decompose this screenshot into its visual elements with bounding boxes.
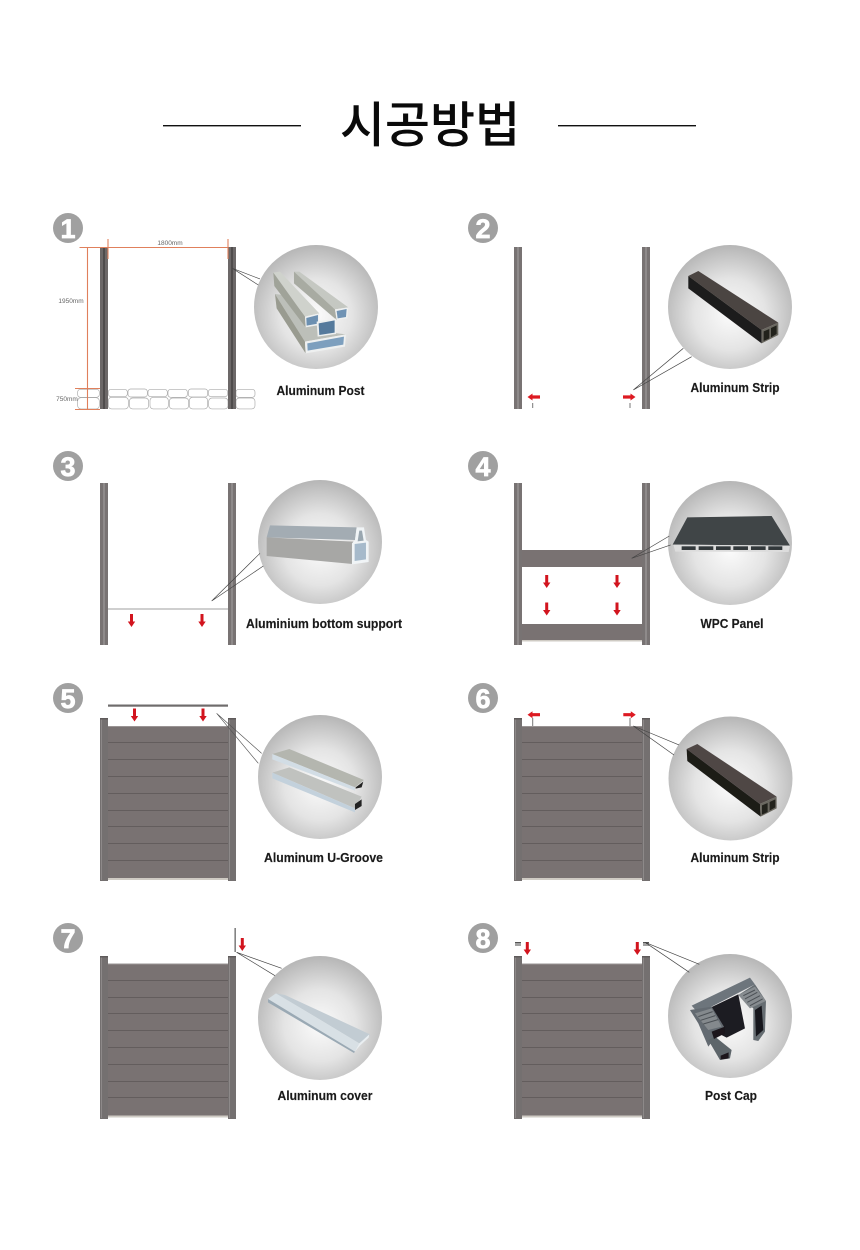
product circle <box>254 245 378 369</box>
product: aluminum cover <box>237 952 370 1053</box>
product circle <box>258 956 382 1080</box>
product circle <box>668 481 792 605</box>
badge 2 <box>468 213 498 244</box>
product: post cap <box>645 942 766 1060</box>
product: u-groove <box>217 713 364 812</box>
dimension 1950mm: 1950mm <box>58 298 84 305</box>
badge 4: 4 <box>475 452 491 482</box>
product: aluminum strip <box>633 726 777 817</box>
post left <box>100 483 108 645</box>
product: WPC panel <box>632 516 790 558</box>
strip markers <box>533 403 630 408</box>
panel lower <box>522 624 642 642</box>
arrow left <box>528 711 540 718</box>
dimension lines <box>75 239 228 410</box>
panel: step 5 aluminum u-groove <box>53 683 383 881</box>
badge 1: 1 <box>60 214 76 244</box>
badge 7: 7 <box>60 924 76 954</box>
arrows down <box>131 708 207 722</box>
post left <box>100 956 108 1119</box>
panel upper <box>522 550 642 567</box>
dimension 750mm: 750mm <box>56 396 78 403</box>
post cap small left <box>515 942 521 946</box>
product circle <box>668 245 792 369</box>
title rule right <box>558 125 696 126</box>
product circle <box>258 715 382 839</box>
arrow down right <box>198 614 206 627</box>
badge 3 <box>53 451 83 482</box>
strip markers <box>533 718 630 726</box>
panel: step 7 aluminum cover <box>53 923 382 1119</box>
panel: step 8 post cap <box>468 923 792 1119</box>
badge 7 <box>53 923 83 954</box>
fence panels <box>108 726 228 880</box>
post right <box>228 483 236 645</box>
badge 8 <box>468 923 498 954</box>
label: Post Cap <box>705 1089 757 1103</box>
product: aluminum post <box>232 268 348 353</box>
arrow right <box>623 711 636 718</box>
post right <box>642 483 650 645</box>
arrow down left <box>128 614 135 627</box>
post right <box>228 956 236 1119</box>
arrow left <box>528 394 540 400</box>
post right <box>228 247 236 409</box>
label: Aluminum Strip <box>690 381 780 395</box>
post left <box>100 718 108 881</box>
arrows down <box>524 942 641 955</box>
arrows down <box>543 575 621 616</box>
badge 8: 8 <box>475 924 491 954</box>
u-groove rail <box>108 704 228 707</box>
panel: step 3 aluminium bottom support <box>53 451 403 645</box>
panel: step 6 aluminum strip <box>468 683 792 881</box>
badge 1 <box>53 213 83 244</box>
label: Aluminium bottom support <box>246 617 403 631</box>
title rule left <box>163 125 301 126</box>
bottom support rail <box>108 608 228 610</box>
badge 6 <box>468 683 498 714</box>
label: Aluminum Post <box>276 384 365 398</box>
label: WPC Panel <box>700 617 764 631</box>
badge 4 <box>468 451 498 482</box>
arrow right <box>623 394 636 400</box>
label: Aluminum cover <box>278 1089 373 1103</box>
post right <box>642 247 650 409</box>
arrow down <box>239 938 246 951</box>
product circle <box>258 480 382 604</box>
post left <box>514 483 522 645</box>
post cap small right <box>643 942 649 946</box>
panel: step 1 aluminum post <box>53 213 378 410</box>
post left <box>514 247 522 409</box>
product circle <box>668 954 792 1078</box>
post left <box>100 247 108 409</box>
label: Aluminum U-Groove <box>264 851 383 865</box>
fence panels <box>108 964 228 1118</box>
panel: step 2 aluminum strip <box>468 213 792 409</box>
post left <box>514 956 522 1119</box>
badge 2: 2 <box>475 214 491 244</box>
title: 시공방법 <box>340 99 520 153</box>
stone foundation <box>78 389 255 409</box>
aluminum cover piece <box>234 928 236 952</box>
post right <box>642 956 650 1119</box>
badge 3: 3 <box>60 452 76 482</box>
product: aluminum strip <box>633 271 778 390</box>
panel: step 4 WPC panel <box>468 451 792 645</box>
badge 6: 6 <box>475 684 491 714</box>
post right <box>642 718 650 881</box>
dimension 1800mm: 1800mm <box>157 240 183 247</box>
product: bottom support <box>212 525 369 601</box>
product circle <box>668 716 792 840</box>
label: Aluminum Strip <box>690 851 780 865</box>
post left <box>514 718 522 881</box>
post right <box>228 718 236 881</box>
badge 5 <box>53 683 83 714</box>
fence panels <box>522 726 642 880</box>
fence panels <box>522 964 642 1118</box>
badge 5: 5 <box>60 684 76 714</box>
